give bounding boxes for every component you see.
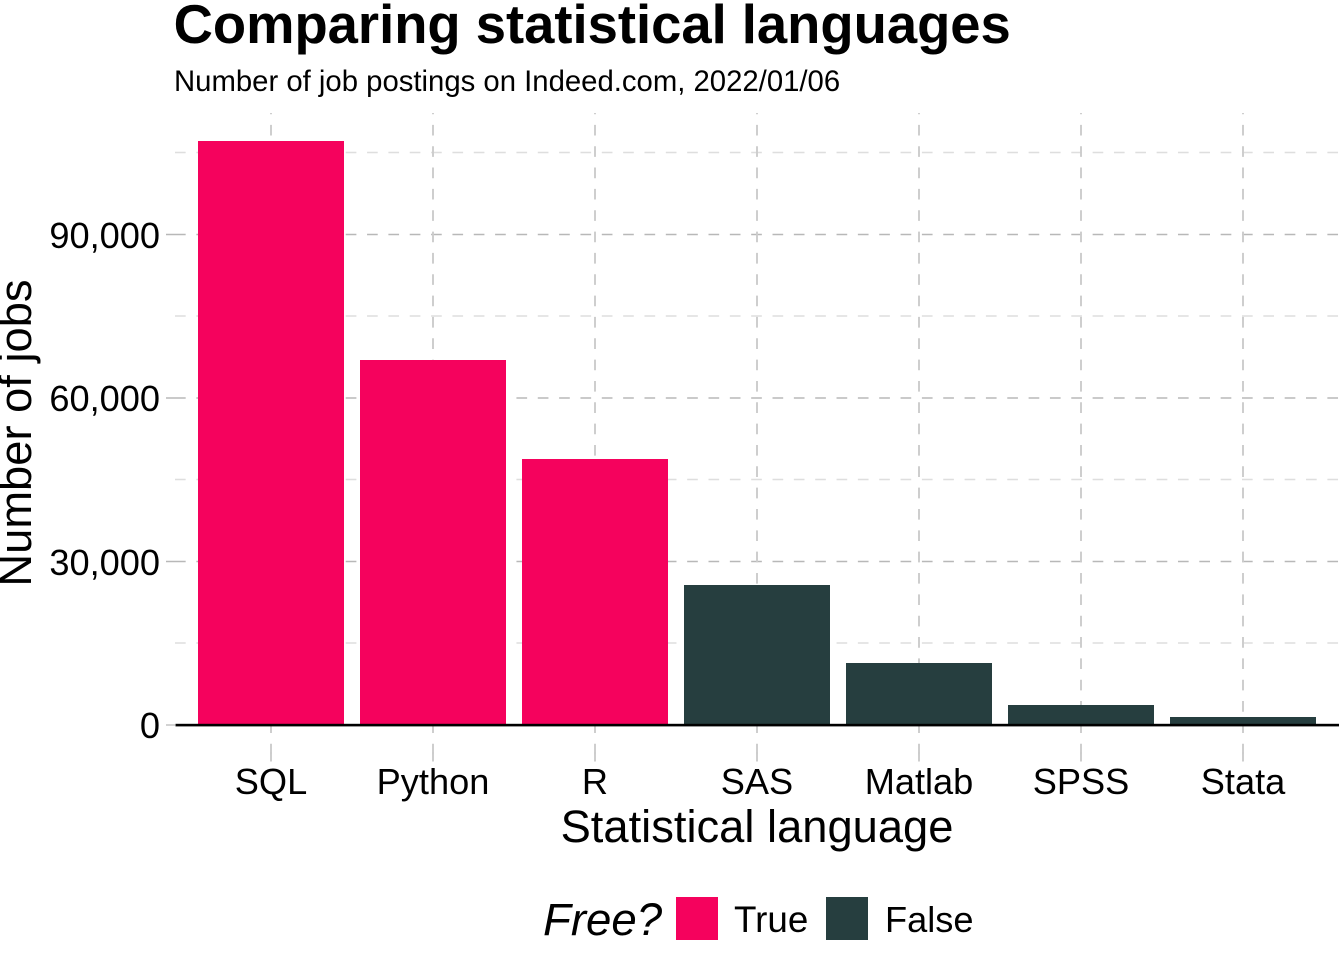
legend swatch: True: [676, 897, 718, 940]
y axis tick labels: [49, 215, 160, 746]
x axis tick labels: SAS: [721, 761, 793, 802]
x axis title: Statistical language: [561, 801, 953, 852]
x axis tick labels: Python: [377, 761, 489, 802]
bar: SPSS: [1008, 705, 1154, 725]
x axis line: [176, 724, 1339, 726]
x axis tick labels: Stata: [1201, 761, 1286, 802]
bar: SAS: [684, 585, 830, 725]
x axis tick labels: SQL: [235, 761, 307, 802]
y axis tick labels: 0: [140, 705, 160, 746]
bar: SQL: [198, 141, 344, 725]
y axis tick labels: 60,000: [49, 378, 160, 419]
legend label: False: False: [885, 899, 974, 940]
x axis tick labels: [235, 761, 1286, 802]
legend label: True: True: [734, 899, 808, 940]
bar: R: [522, 459, 668, 725]
bar: Matlab: [846, 663, 992, 725]
y axis tick labels: 90,000: [49, 215, 160, 256]
x axis tick labels: R: [582, 761, 608, 802]
y axis tick labels: 30,000: [49, 542, 160, 583]
legend: [543, 894, 974, 945]
bar: Stata: [1170, 717, 1316, 725]
legend swatch: False: [826, 897, 868, 940]
x axis tick labels: SPSS: [1033, 761, 1129, 802]
subtitle: Number of job postings on Indeed.com, 2022/01/06: [174, 65, 840, 98]
bar chart: [198, 141, 1316, 725]
bar: Python: [360, 360, 506, 725]
x axis tick labels: Matlab: [865, 761, 973, 802]
legend title: Free?: [543, 894, 663, 945]
